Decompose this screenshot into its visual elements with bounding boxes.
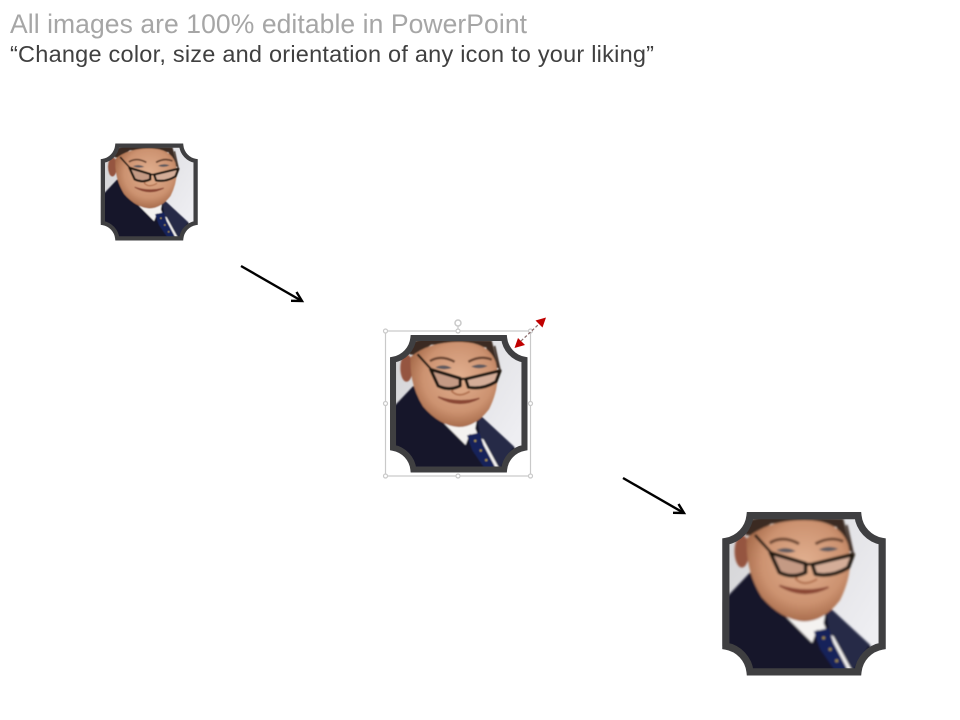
subtitle: “Change color, size and orientation of any icon to your liking” [10,41,654,67]
arrow: small to medium [241,266,302,301]
resize arrow: red double-headed dashed [514,318,546,348]
arrow: medium to large [623,478,684,513]
title: All images are 100% editable in PowerPoint [10,9,528,39]
icon: small framed portrait [101,144,198,240]
icon: medium framed portrait [390,335,528,472]
selection box around medium portrait [384,320,532,478]
icon: large framed portrait [722,512,886,676]
